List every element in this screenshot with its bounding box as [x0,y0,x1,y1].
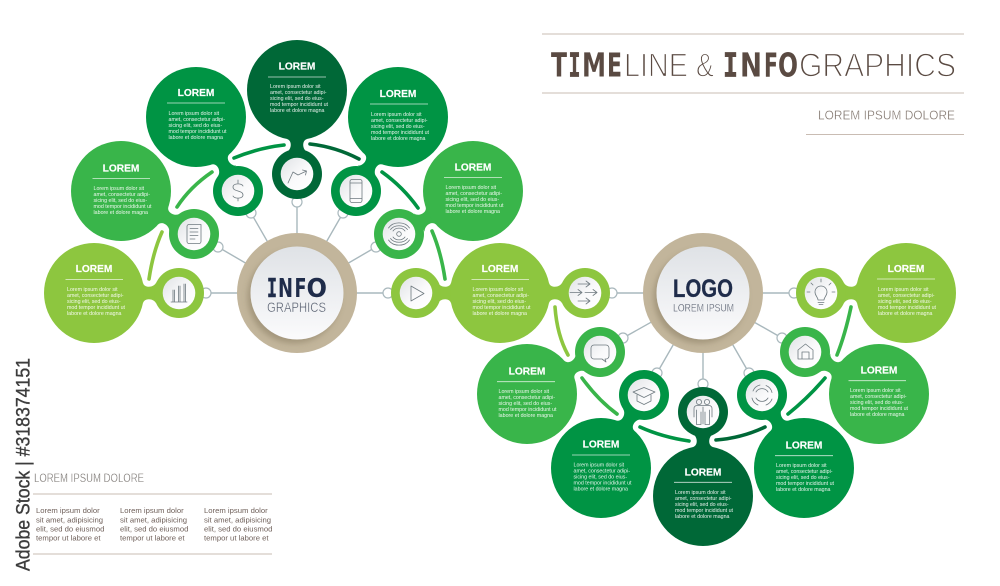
body text: labore et dolore magna [94,210,148,216]
label: LOREM [861,365,897,376]
node: right 7 (light bulb) [796,243,956,343]
body text: Lorem ipsum dolor sit [850,388,901,394]
body text: amet, consectetur adipi- [168,117,225,123]
node: right 6 (house) [780,327,929,444]
column 1: Lorem ipsum dolor [36,506,100,515]
body text: mod tempor incididunt ut [574,480,632,486]
body text: labore et dolore magna [472,311,527,317]
body text: mod tempor incididunt ut [776,481,835,487]
column 3: elit, sed do eiusmod [204,524,272,534]
body text: sicing elit, sed do eius- [878,299,932,305]
icon: phone [350,180,362,202]
node: right 3 (graduation cap) [551,370,669,518]
label: LOREM [380,89,416,100]
body text: labore et dolore magna [850,412,905,418]
body text: mod tempor incididunt ut [850,406,909,412]
bottom-left text panel [33,473,272,554]
node: left 3 (dollar) [146,67,263,216]
label: LOREM [583,440,619,450]
body text: amet, consectetur adipi- [67,293,124,299]
title: I [723,46,738,84]
label: LOREM [178,88,214,99]
label: LOREM [509,366,545,378]
title block [542,34,964,134]
title: I [568,46,580,84]
body text: sicing elit, sed do eius- [67,299,121,305]
icon: trend line [288,170,306,183]
body text: Lorem ipsum dolor sit [94,186,145,192]
body text: sicing elit, sed do eius- [776,475,830,481]
body text: sicing elit, sed do eius- [94,198,147,204]
body text: Lorem ipsum dolor sit [574,462,625,468]
node: left 6 (signal) [374,141,523,259]
icon: people [694,399,712,424]
hub title: O [306,274,327,304]
title: T [551,46,567,84]
icon: light bulb [807,279,835,304]
label: LOREM [279,62,315,72]
body text: mod tempor incididunt ut [446,203,504,209]
body text: Lorem ipsum dolor sit [675,490,726,496]
body text: Lorem ipsum dolor sit [498,389,550,395]
column 2: tempor ut labore et [120,534,185,543]
body text: mod tempor incididunt ut [270,102,329,108]
icon: speech bubble [591,345,609,362]
label: LOREM [76,264,112,275]
body text: Lorem ipsum dolor sit [371,112,422,118]
hub subtitle: GRAPHICS [267,300,326,315]
node: left 2 (document) [71,141,219,259]
node: right 4 (people) [653,387,753,546]
body text: amet, consectetur adipi- [878,293,935,299]
title: O [778,46,798,84]
body text: sicing elit, sed do eius- [371,124,425,130]
node: left 7 (play) [391,243,550,343]
curved accents [149,144,851,441]
hub title: F [294,274,306,304]
body text: Lorem ipsum dolor sit [168,111,220,117]
body text: labore et dolore magna [270,108,325,114]
body text: sicing elit, sed do eius- [850,400,904,406]
column 2: Lorem ipsum dolor [120,506,184,515]
icon: bar chart [171,284,187,302]
node: left 5 (phone) [331,67,448,216]
body text: Lorem ipsum dolor sit [67,287,118,293]
title: E [607,46,622,84]
body text: amet, consectetur adipi- [850,394,907,400]
body text: Lorem ipsum dolor sit [270,84,321,90]
body text: amet, consectetur adipi- [574,468,630,474]
icon: cycle rings [752,385,772,405]
body text: sicing elit, sed do eius- [270,96,324,102]
body text: mod tempor incididunt ut [498,407,557,413]
node: right 1 (arrows) [472,264,610,318]
hub subtitle: LOREM IPSUM [673,302,734,314]
title: F [764,46,778,84]
body text: amet, consectetur adipi- [498,395,555,401]
title: & [696,46,714,84]
body text: amet, consectetur adipi- [371,118,428,124]
hub title: N [278,274,293,304]
column 1: tempor ut labore et [36,534,101,543]
body text: mod tempor incididunt ut [67,305,126,311]
icon: graduation cap [633,388,655,404]
hub: logo [643,233,763,353]
body text: mod tempor incididunt ut [371,130,430,136]
icon: dollar [233,180,243,201]
title: GRAPHICS [799,46,956,84]
icon: arrows [570,281,597,304]
body text: amet, consectetur adipi- [675,496,732,502]
icon: house [798,344,813,359]
body text: labore et dolore magna [168,135,223,141]
body text: Lorem ipsum dolor sit [878,287,929,293]
column 3: sit amet, adipisicing [204,515,271,524]
body text: labore et dolore magna [67,311,122,317]
body text: sicing elit, sed do eius- [498,401,552,407]
panel heading: LOREM IPSUM DOLORE [34,473,144,485]
label: LOREM [103,164,139,174]
label: LOREM [685,467,721,478]
label: LOREM [786,441,822,452]
node: right 2 (speech) [477,327,625,444]
node: left 4 (trend) [247,40,347,199]
body text: labore et dolore magna [574,486,628,492]
body text: amet, consectetur adipi- [94,192,150,198]
node: right 5 (cycle) [737,370,854,518]
body text: Lorem ipsum dolor sit [472,287,524,293]
column 3: tempor ut labore et [204,534,269,543]
body text: sicing elit, sed do eius- [574,474,627,480]
body text: Lorem ipsum dolor sit [446,185,497,191]
body text: amet, consectetur adipi- [446,191,502,197]
title [551,46,956,84]
body text: labore et dolore magna [371,136,426,142]
column 2: elit, sed do eiusmod [120,524,188,534]
icon: signal [388,223,410,245]
body text: labore et dolore magna [675,514,730,520]
hub title: LOGO [673,275,733,303]
node: left 1 (chart) [44,243,204,343]
body text: labore et dolore magna [498,413,553,419]
column 1: sit amet, adipisicing [36,515,103,524]
body text: labore et dolore magna [446,209,500,215]
connectors: left hub [201,197,393,298]
body text: sicing elit, sed do eius- [446,197,499,203]
body text: mod tempor incididunt ut [168,129,227,135]
connectors: right hub [607,288,799,389]
body text: sicing elit, sed do eius- [472,299,526,305]
body text: sicing elit, sed do eius- [168,123,222,129]
title: N [740,46,762,84]
label: LOREM [455,162,491,174]
hub title: I [267,274,277,304]
vertical stock id text: Adobe Stock | #318374151 [14,358,34,571]
hub title [267,274,327,304]
body text: amet, consectetur adipi- [472,293,529,299]
body text: labore et dolore magna [776,487,831,493]
title: LINE [624,46,688,84]
column 1: elit, sed do eiusmod [36,524,104,534]
body text: sicing elit, sed do eius- [675,502,729,508]
column 2: sit amet, adipisicing [120,515,187,524]
body text: mod tempor incididunt ut [878,305,937,311]
body text: Lorem ipsum dolor sit [776,463,827,469]
subtitle: LOREM IPSUM DOLORE [818,108,955,122]
title: M [582,46,606,84]
icon: document [187,224,201,244]
body text: mod tempor incididunt ut [94,204,152,210]
icon: play [411,286,424,301]
body text: mod tempor incididunt ut [675,508,734,514]
label: LOREM [482,264,518,275]
body text: mod tempor incididunt ut [472,305,531,311]
body text: amet, consectetur adipi- [270,90,327,96]
body text: amet, consectetur adipi- [776,469,833,475]
hub: info graphics [237,233,357,353]
column 3: Lorem ipsum dolor [204,506,268,515]
body text: labore et dolore magna [878,311,933,317]
label: LOREM [888,264,924,275]
